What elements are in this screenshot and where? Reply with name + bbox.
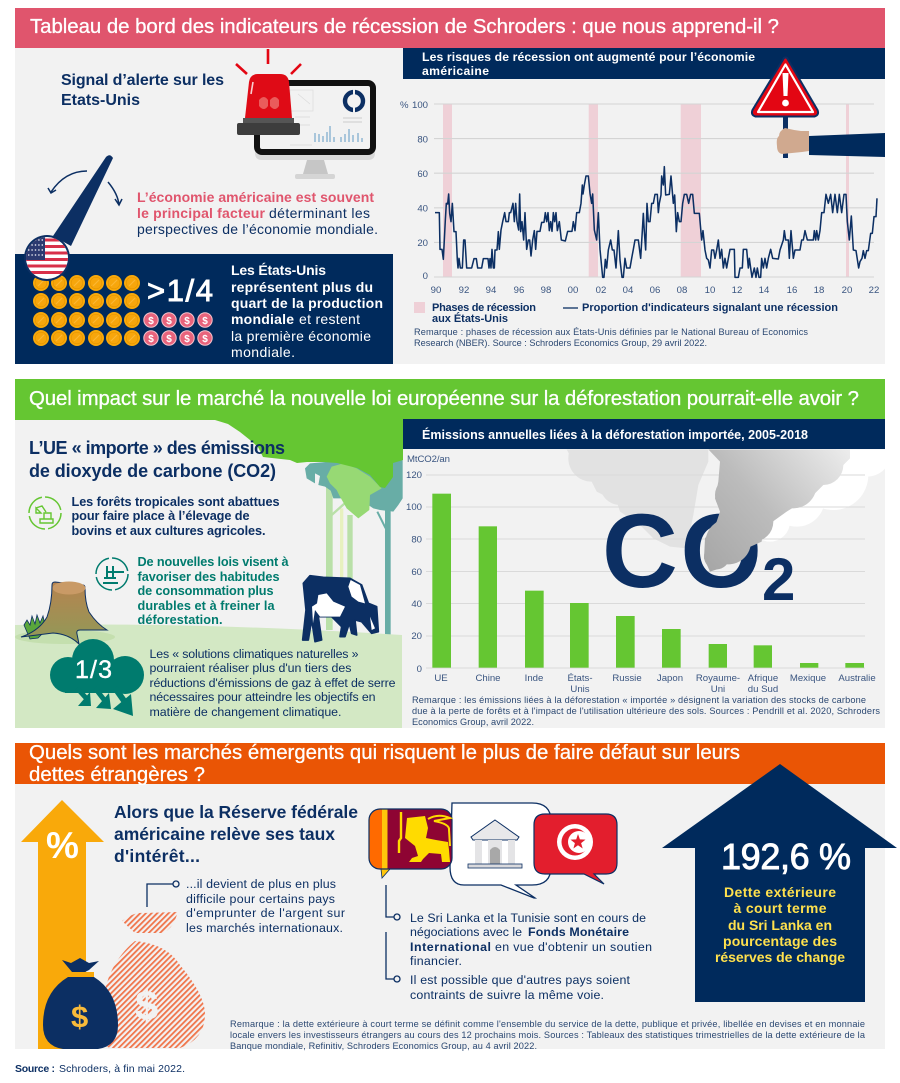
text: natural climate solutions: nécessaires pour atteindre les objectifs en [150,690,376,704]
line chart: recession indicators: 90 [431,285,441,296]
text: negotiations: Fonds Monétaire [528,925,629,939]
note: chart source: Research (NBER). Source : Schroders Economics Group, 29 avril 2022. [414,338,707,348]
text: negotiations: Le Sri Lanka et la Tunisie sont en cours de [410,911,646,925]
bar chart: emissions by country: UE [434,673,448,684]
bar chart: emissions by country: 20 [411,631,422,642]
line chart: recession indicators: 02 [596,285,606,296]
callout: Sri Lanka debt arrow: à court terme [734,900,827,916]
source line: Schroders, à fin mai 2022. [59,1063,185,1075]
bar chart: emissions by country: Japon [657,673,683,684]
line chart: recession indicators: 18 [814,285,824,296]
panel: deforestation background [15,420,885,728]
icon: navy money bag [43,958,118,1049]
bar chart: emissions by country: 60 [411,567,422,578]
heading: EU imports emissions: L’UE « importe » des émissions [29,438,285,458]
text: negotiations [410,911,652,1002]
heading: warning signal [61,72,224,109]
icon: excavator [29,497,61,529]
callout: Sri Lanka debt arrow [662,764,897,1002]
text: negotiations: en vue d'obtenir un soutien [495,940,652,954]
bar chart: emissions by country: Chine [475,673,501,684]
icon group: coins: $ [148,334,154,345]
callout: Sri Lanka debt arrow: réserves de change [715,949,845,965]
text: natural climate solutions: pourraient réaliser plus d'un tiers des [150,661,352,675]
icon: navy money bag: $ [71,999,88,1034]
chart header: recession risk [403,48,885,79]
text: new laws: favoriser des habitudes [138,570,280,584]
text: tropical forests: bovins et aux cultures agricoles. [72,524,266,538]
header banner: recession: Tableau de bord des indicateurs de récession de Schroders : que nous apprend-il ? [30,16,779,38]
text: tropical forests [72,495,280,538]
note: chart source: due à la perte de forêts et à l'impact de l'utilisation ultérieure des sols. Sources : Pendrill et al. 2020, Schroders [412,706,880,716]
text: new laws: déforestation. [138,613,222,627]
bar chart: emissions by country: Royaume- [696,673,740,684]
heading: Federal Reserve: américaine relève ses taux [114,824,335,844]
text: US economy: L’économie américaine est souvent [137,189,374,205]
icon: cloud one third: 1/3 [75,656,112,684]
icon: hatched money bag: $ [135,982,158,1029]
icon: grazing cow [303,576,378,642]
text: US share of output: Les États-Unis [231,262,326,278]
callout: Sri Lanka debt arrow: du Sri Lanka en [728,917,832,933]
line chart: recession indicators: 96 [514,285,524,296]
bar chart: emissions by country: Australie [838,673,876,684]
text: harder borrowing: les marchés internationaux. [186,921,343,935]
heading: warning signal: Signal d’alerte sur les [61,72,224,89]
text: new laws: De nouvelles lois visent à [138,555,289,569]
text: US share of output: et restent [299,311,360,327]
text: natural climate solutions: Les « solutions climatiques naturelles » [150,647,359,661]
text: natural climate solutions: matière de changement climatique. [150,705,342,719]
text: natural climate solutions: réductions d'émissions de gaz à effet de serre [150,676,396,690]
note: debt definition [230,1019,866,1051]
bar chart: emissions by country: 40 [411,599,422,610]
chart legend: aux États-Unis [432,312,508,325]
text: US share of output: quart de la production [231,295,383,311]
line chart: recession indicators: % [400,100,409,111]
chart legend [414,302,838,325]
line chart: recession indicators: 80 [417,134,428,146]
note: chart source: Remarque : phases de récession aux États-Unis définies par le National Bureau of Economics [414,327,808,337]
text: natural climate solutions [150,647,396,719]
text: new laws: de consommation plus [138,584,274,598]
connector: fed text [147,881,179,907]
text: negotiations: International [410,940,491,954]
illustration: trees [215,419,403,635]
chart header: recession risk: américaine [422,64,489,78]
text: negotiations: contraints de suivre la même voie. [410,988,604,1002]
header banner: emerging markets: dettes étrangères ? [29,764,205,786]
chart legend: Phases de récession [432,302,536,314]
chart header: recession risk: Les risques de récession ont augmenté pour l’économie [422,50,755,64]
icon: Tunisia flag bubble [534,814,617,884]
icon group: coins: $ [166,334,172,345]
bar chart: emissions by country [406,454,876,695]
icon: hatched money bag [101,912,205,1048]
text: US economy: le principal facteur [137,205,266,221]
note: chart source: Economics Group, avril 2022. [412,717,534,727]
icon: US flag [24,235,70,281]
figure: more than a quarter: >1/4 [147,273,213,308]
icon: red siren [236,49,301,135]
text: harder borrowing: d'emprunter de l'argent sur [186,906,345,920]
callout: Sri Lanka debt arrow: Dette extérieure [724,884,836,900]
line chart: recession indicators: 98 [541,285,551,296]
bar chart: emissions by country: MtCO2/an [407,454,450,465]
icon: monitor with dashboard [255,83,375,179]
line chart: recession indicators: 16 [787,285,797,296]
bar chart: emissions by country: Inde [525,673,543,684]
illustration: smoke behind chart [567,450,885,548]
note: debt definition: Remarque : la dette extérieure à court terme se définit comme l'ensemble du service de la dette, publique et privée, libellée en devises et en monnaie [230,1019,865,1029]
section: deforestation law [15,379,892,728]
bar chart: emissions by country: Mexique [790,673,826,684]
icon: hand holding warning sign [752,58,885,158]
chart legend: Proportion d'indicateurs signalant une récession [582,302,838,314]
bar chart: emissions by country: Uni [711,684,725,695]
line chart: recession indicators: 40 [417,204,428,214]
icon group: coins: $ [202,316,208,327]
heading: EU imports emissions [29,438,285,481]
icon group: coins: $ [202,334,208,345]
heading: Federal Reserve: Alors que la Réserve fédérale [114,802,358,822]
panel: navy share box [15,254,393,364]
icon: cloud one third [50,639,144,716]
line chart: recession indicators: 60 [417,169,428,180]
icon: Sri Lanka flag bubble [369,809,452,878]
source line: Source : [15,1063,55,1075]
line chart: recession indicators: 20 [417,238,428,249]
note: chart source [412,695,880,727]
bar chart: emissions by country: Russie [612,673,642,684]
text: negotiations: Il est possible que d'autres pays soient [410,973,631,987]
line chart: recession indicators: 0 [423,271,428,282]
heading: Federal Reserve: d'intérêt... [114,846,200,866]
chart header: imported deforestation [403,419,885,449]
header banner: emerging markets [15,742,885,786]
icon: gavel [96,558,128,590]
icon group: coins: $ [184,316,190,327]
heading: Federal Reserve [114,802,358,866]
line chart: recession indicators: 10 [705,285,715,296]
line chart: recession indicators [400,100,879,296]
bar chart: emissions by country: 120 [406,470,422,481]
text: harder borrowing [186,877,345,935]
line chart: recession indicators: 04 [623,285,634,296]
bar chart: emissions by country: États- [567,673,593,684]
chart header: imported deforestation: Émissions annuelles liées à la déforestation importée, 2005-2018 [422,427,808,442]
header banner: recession [15,8,885,48]
line chart: recession indicators: 08 [677,285,687,296]
illustration: dark smoke over CO2 [704,445,850,572]
text: US economy: perspectives de l’économie mondiale. [137,221,378,237]
line chart: recession indicators: 20 [842,285,852,296]
header banner: deforestation: Quel impact sur le marché la nouvelle loi européenne sur la déforestation pourrait-elle avoir ? [29,388,859,410]
bar chart: emissions by country: Unis [570,684,590,695]
text: harder borrowing: ...il devient de plus en plus [186,877,336,891]
line chart: recession indicators: 92 [459,285,469,296]
line chart: recession indicators: 94 [486,285,497,296]
text: negotiations: financier. [410,954,462,968]
icon: rising rate arrow: % [46,825,79,866]
callout: Sri Lanka debt arrow: pourcentage des [723,933,837,949]
header banner: deforestation [15,379,885,420]
note: chart source: Remarque : les émissions liées à la déforestation « importée » désignent la variation des stocks de carbone [412,695,866,705]
label: CO2: CO [602,493,762,610]
heading: warning signal: Etats-Unis [61,92,140,109]
text: US share of output [231,262,383,360]
icon: rotation arrows [48,171,122,205]
label: CO2: 2 [762,546,795,613]
text: harder borrowing: difficile pour certains pays [186,892,335,906]
text: US share of output: la première économie [231,328,371,344]
text: US share of output: mondiale. [231,344,295,360]
text: tropical forests: pour faire place à l’élevage de [72,509,250,523]
line chart: recession indicators: 00 [568,285,578,296]
text: new laws [138,555,289,627]
heading: EU imports emissions: de dioxyde de carbone (CO2) [29,461,276,481]
icon group: coins: $ [184,334,190,345]
panel: recession background [15,48,885,364]
bar chart: emissions by country: 100 [406,502,422,513]
icon group: coins [33,275,212,346]
icon: speech bubble with bank [450,803,551,898]
icon: pointer needle [53,155,113,246]
note: chart source [414,327,808,348]
text: tropical forests: Les forêts tropicales sont abattues [72,495,280,509]
text: US share of output: représentent plus du [231,279,373,295]
text: US economy: déterminant les [269,205,370,221]
connectors: bullets [386,885,400,982]
panel: emerging background [15,784,885,1049]
line chart: recession indicators: 12 [732,285,742,296]
text: US share of output: mondiale [231,311,294,327]
text: negotiations: négociations avec le [410,925,522,939]
note: debt definition: Banque mondiale, Refinitiv, Schroders Economics Group, au 4 avril 2022. [230,1041,537,1051]
bar chart: emissions by country: 0 [417,664,422,675]
icon: rising rate arrow [21,800,104,1049]
icon group: coins: $ [166,316,172,327]
note: debt definition: locale envers les investisseurs étrangers au cours des 12 prochains mois. Sources : Tableaux des statistiques trimestrielles de la dette extérieure de la [230,1030,866,1040]
text: new laws: durables et à freiner la [138,599,275,613]
bar chart: emissions by country: 80 [411,534,422,546]
line chart: recession indicators: 06 [650,285,660,296]
bar chart: emissions by country: du Sud [748,684,778,695]
header banner: emerging markets: Quels sont les marchés émergents qui risquent le plus de faire défaut sur leurs [29,742,740,764]
line chart: recession indicators: 22 [869,285,879,296]
line chart: recession indicators: 14 [759,285,770,296]
line chart: recession indicators: 100 [412,100,428,111]
bar chart: emissions by country: Afrique [748,673,778,684]
panel: grass ground [15,624,402,728]
icon: tree stump [15,582,115,644]
callout: Sri Lanka debt arrow: 192,6 % [721,836,851,877]
section: emerging market default [15,742,897,1051]
section: recession dashboard [15,8,885,364]
text: US economy [137,189,378,237]
icon group: coins: $ [148,316,154,327]
